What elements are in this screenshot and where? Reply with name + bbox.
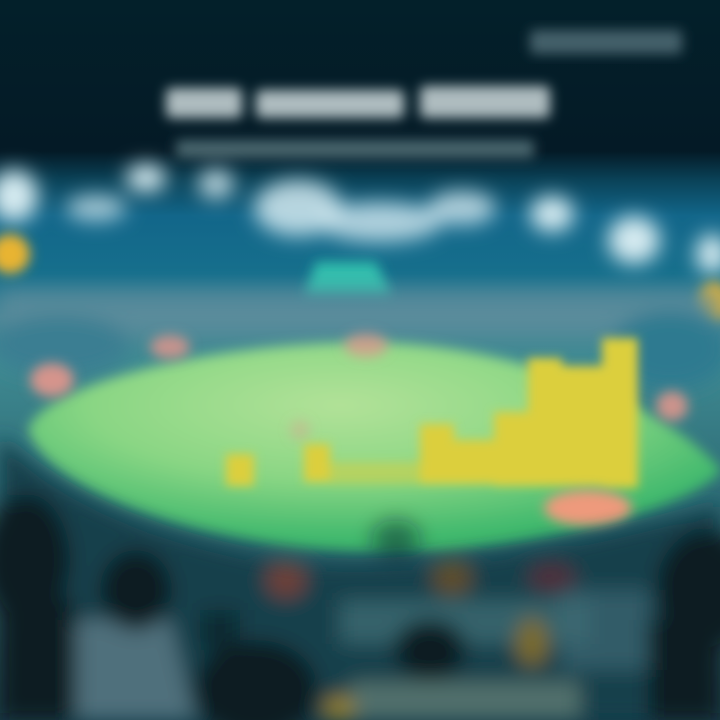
heading (166, 86, 550, 118)
pitch (28, 342, 720, 552)
pink markers around pitch (30, 333, 688, 440)
yellow side markers (0, 234, 720, 322)
crowd silhouettes (0, 494, 720, 720)
title block (166, 86, 550, 158)
crowd foreground (0, 435, 720, 720)
top-right badge (530, 30, 682, 54)
stadium lights and clouds (0, 164, 720, 274)
orange callout (544, 490, 632, 526)
crowd accents (266, 562, 306, 598)
teal callout (304, 262, 392, 296)
stands (0, 290, 720, 390)
bar chart (226, 338, 638, 488)
subheading (176, 140, 534, 158)
